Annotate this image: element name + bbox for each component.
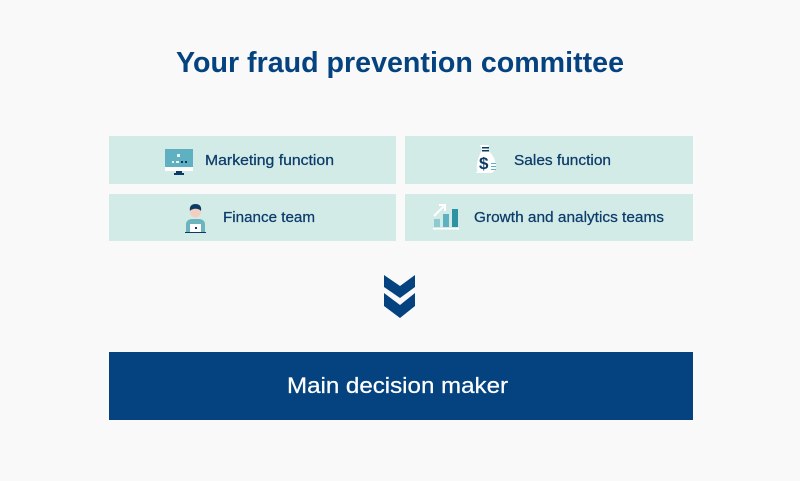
icon: bar chart with arrow [433,205,459,230]
panel: finance team [109,194,396,241]
label: finance team: Finance team [223,210,315,226]
panel: growth and analytics teams [405,194,693,241]
title: Your fraud prevention committee [176,47,624,79]
label: main decision maker: Main decision maker [287,373,509,398]
icon: money bag: $ [479,154,489,173]
label: growth and analytics teams: Growth and analytics teams [474,210,664,226]
icon: money bag [476,145,496,173]
label: marketing function: Marketing function [205,153,334,169]
panel: sales function [405,136,693,184]
label: sales function: Sales function [514,153,611,169]
panel: marketing function [109,136,396,184]
arrow: double chevron down [384,275,415,318]
panel: main decision maker [109,352,693,420]
icon: person with laptop [185,204,206,233]
icon: monitor [165,149,193,175]
